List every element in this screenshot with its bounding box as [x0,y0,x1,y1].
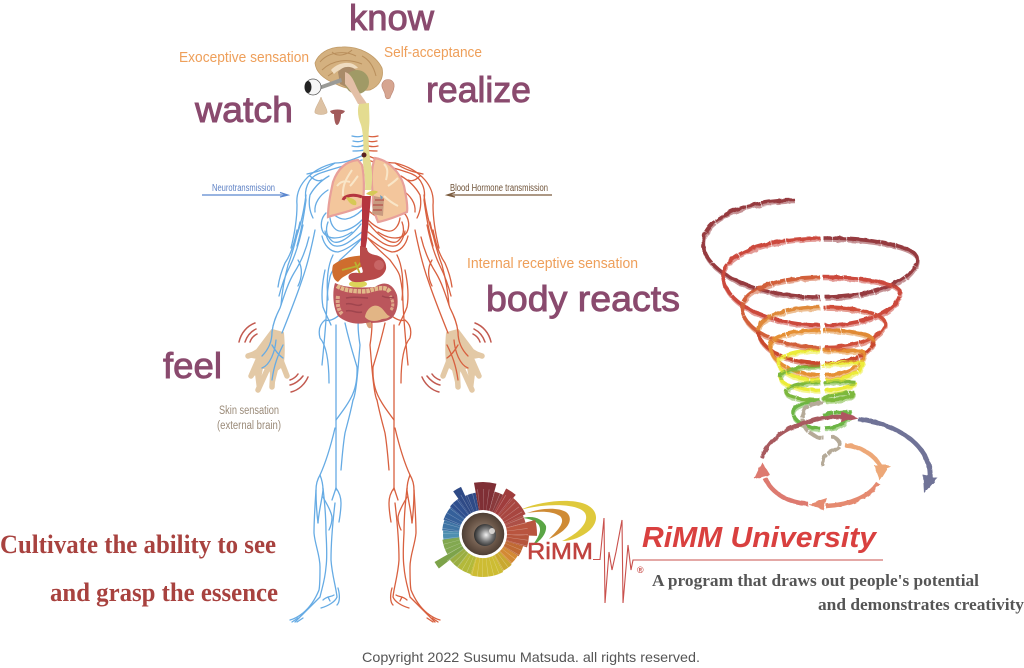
cycle arrow: bottom right [808,483,878,510]
right lung [372,158,407,222]
cycle arrow: top [762,411,858,458]
heart vessels [343,191,384,256]
icon: tongue [330,110,345,125]
vortex spiral [703,200,918,430]
red blood vessel network [366,135,468,622]
cycle arrow: right [845,445,890,481]
gallbladder and bile ducts [342,258,364,274]
exit arrow [858,419,938,493]
logo colour wheel [427,478,539,590]
label: Self-acceptance: Self-acceptance [384,45,482,61]
label: Neurotransmission: Neurotransmission [212,183,275,194]
cycle arrow: bottom left [754,462,808,504]
pancreas [349,280,367,288]
logo wordmark: RiMM [527,538,593,564]
registered mark: ® [637,565,644,575]
sensation waves around hands [239,323,491,392]
label: Internal receptive sensation: Internal receptive sensation [467,256,638,272]
icon: eye [304,78,342,95]
logo eye [461,512,505,556]
logo heartbeat line [593,518,883,603]
title: RiMM University: RiMM University [642,522,878,554]
heading: body reacts: body reacts [486,278,680,319]
label: Skin sensation (external brain): Skin sensation [219,405,279,417]
heading: realize: realize [426,69,531,110]
copyright: Copyright 2022 Susumu Matsuda. all rights reserved. [362,649,700,665]
stomach [348,246,386,282]
central swirl [803,403,840,466]
label: Blood Hormone transmission: Blood Hormone transmission [450,183,548,194]
icon: nose [315,97,327,114]
tagline line 2: and demonstrates creativity [818,595,1024,614]
label: Skin sensation (external brain) [217,405,281,432]
logo swooshes [520,501,596,546]
heading: feel: feel [163,345,222,386]
tagline line 1: A program that draws out people's potential [652,571,979,590]
icon: ear [382,80,394,99]
arrow: neurotransmission [202,192,288,197]
slogan line 1: Cultivate the ability to see [0,530,276,559]
spinal cord [358,103,372,190]
left lung [328,160,364,217]
liver [332,255,374,282]
label: Exoceptive sensation: Exoceptive sensation [179,50,309,66]
arrow: blood hormone transmission [447,192,552,197]
lung bronchi [337,164,398,206]
intestines [333,283,398,328]
slogan line 2: and grasp the essence [50,578,278,607]
hands [247,330,483,390]
icon: brain [315,47,382,104]
ganglion node [362,152,366,158]
logo: RiMM [427,478,883,603]
heading: watch: watch [194,89,293,130]
label: Skin sensation (external brain): (external brain) [217,420,281,432]
blue nerve network [262,135,364,622]
stomach highlight [374,260,384,270]
